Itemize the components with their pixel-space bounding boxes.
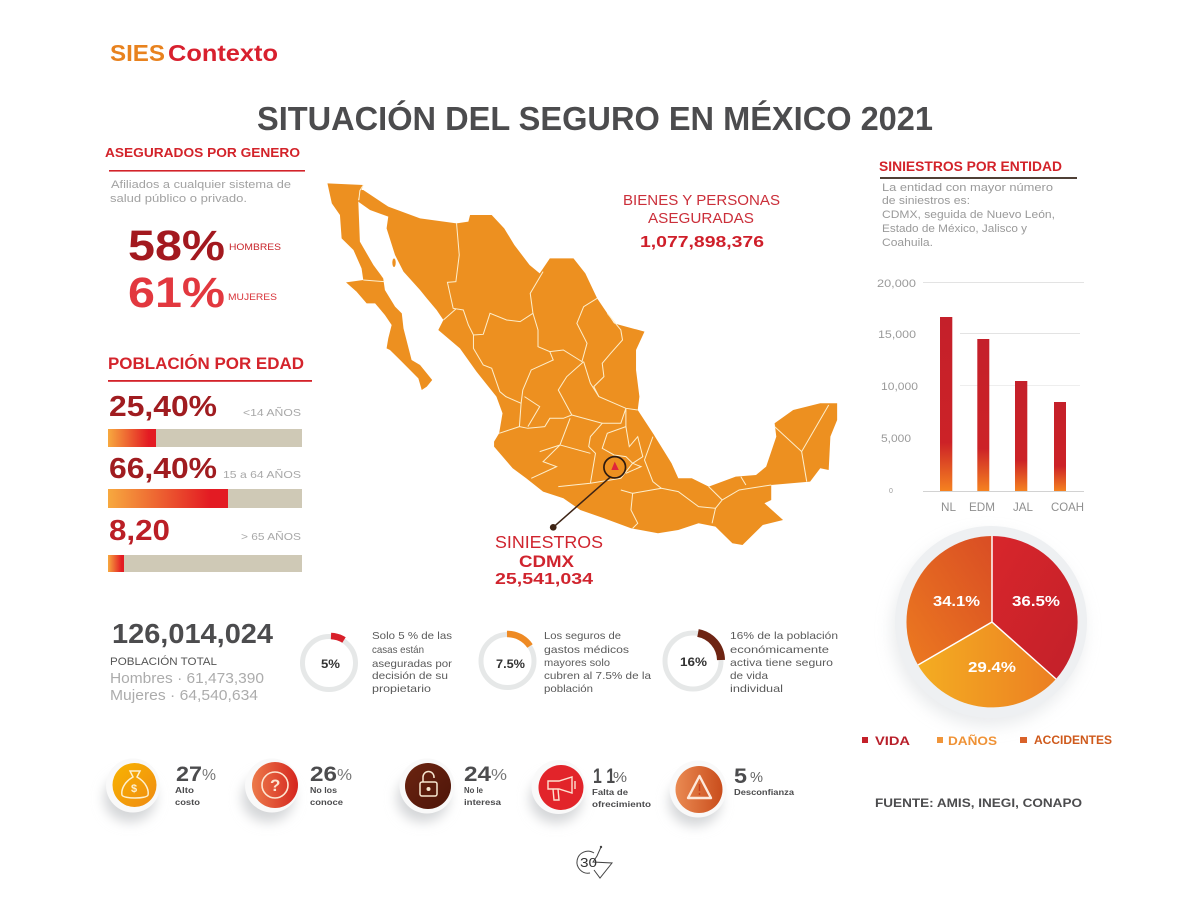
bar chart: siniestros por entidad: 0 [889, 488, 893, 495]
pie chart: tipos de seguro: 36.5% [1012, 593, 1060, 610]
icon: megaphone [530, 760, 586, 823]
bar chart: siniestros por entidad: 10,000 [881, 381, 918, 393]
donut stat: seguro de vida 16%: 16% de la población [730, 630, 838, 642]
legend: pie chart: VIDA [875, 734, 910, 748]
donut stat: casas 5%: aseguradas por [372, 658, 453, 670]
reason: no los conoce 26%: 26 [310, 763, 337, 786]
text block: entidad con mayor número: Coahuila. [882, 237, 933, 249]
callout: siniestros CDMX: CDMX [519, 552, 575, 571]
reason: no los conoce 26% [242, 758, 352, 822]
reason: desconfianza 5% [669, 760, 795, 826]
reason: alto costo 27% [104, 758, 216, 822]
stat: población total: POBLACIÓN TOTAL [110, 655, 217, 668]
donut stat: casas 5%: decisión de su [372, 670, 448, 682]
legend: pie chart [862, 733, 1112, 748]
text block: entidad con mayor número: La entidad con mayor número [882, 182, 1053, 194]
page number: 30: 30 [580, 855, 597, 870]
donut stat: gastos médicos 7.5%: 7.5% [496, 657, 525, 671]
pie chart: tipos de seguro: 29.4% [968, 659, 1016, 676]
donut stat: gastos médicos 7.5%: Los seguros de [544, 630, 621, 642]
reason: desconfianza 5%: 5 [734, 765, 747, 788]
donut stat: casas 5%: propietario [372, 683, 431, 695]
reason: falta de ofrecimiento 11%: % [613, 769, 627, 786]
donut stat: gastos médicos 7.5%: cubren al 7.5% de la [544, 670, 651, 682]
age group: mayores de 65: > 65 AÑOS [241, 530, 301, 543]
callout: siniestros CDMX: 25,541,034 [495, 571, 593, 588]
callout: bienes y personas aseguradas: 1,077,898,376 [640, 234, 764, 251]
text block: afiliados [110, 179, 291, 205]
legend: pie chart: DAÑOS [948, 733, 997, 748]
donut stat: casas 5%: casas están [372, 644, 424, 656]
reason: no le interesa 24% [397, 758, 507, 822]
panel: siniestros por entidad [877, 159, 1084, 514]
reason: falta de ofrecimiento 11%: 1 1 [593, 765, 615, 788]
reason: no los conoce 26%: conoce [310, 798, 344, 807]
icon: padlock [397, 758, 454, 822]
text block: entidad con mayor número: de siniestros es: [882, 195, 970, 207]
panel: asegurados por genero [105, 145, 305, 317]
bar chart: siniestros por entidad: 20,000 [877, 278, 916, 290]
pie chart: tipos de seguro: 34.1% [933, 593, 980, 610]
donut stat: gastos médicos 7.5%: gastos médicos [544, 644, 629, 656]
reason: no le interesa 24%: interesa [464, 798, 502, 807]
reason: falta de ofrecimiento 11% [530, 760, 651, 823]
bar chart: siniestros por entidad: 15,000 [878, 329, 916, 341]
title: SITUACIÓN DEL SEGURO EN MÉXICO 2021 [257, 100, 933, 137]
reason: alto costo 27%: costo [175, 798, 200, 807]
reason: no le interesa 24%: % [491, 767, 507, 784]
stat: 61% mujeres: 61% [128, 269, 225, 317]
reason: falta de ofrecimiento 11%: Falta de [592, 788, 629, 797]
stat: población total: Hombres · 61,473,390 [110, 670, 264, 687]
age group: mayores de 65 [108, 515, 302, 572]
map: Mexico [327, 183, 837, 545]
donut stat: gastos médicos 7.5%: población [544, 683, 593, 695]
reason: alto costo 27%: % [202, 767, 216, 784]
donut stat: seguro de vida 16%: individual [730, 683, 783, 695]
legend: pie chart: ACCIDENTES [1034, 733, 1112, 747]
stat: 61% mujeres: MUJERES [228, 292, 277, 303]
logo: SIES Contexto: Contexto [168, 40, 278, 66]
age group: menores de 14: <14 AÑOS [243, 406, 301, 419]
reason: no los conoce 26%: % [337, 767, 352, 784]
reason: alto costo 27%: Alto [175, 786, 194, 795]
stat: 61% mujeres [128, 269, 277, 317]
donut stat: seguro de vida 16%: económicamente [730, 644, 829, 656]
reason: no le interesa 24%: No le [464, 786, 484, 795]
reason: alto costo 27%: 27 [176, 763, 202, 786]
heading: siniestros por entidad: SINIESTROS POR ENTIDAD [879, 159, 1062, 174]
icon: question mark: ? [270, 776, 280, 795]
reason: no le interesa 24%: 24 [464, 763, 491, 786]
donut stat: seguro de vida 16%: de vida [730, 670, 768, 682]
reason: falta de ofrecimiento 11%: ofrecimiento [592, 800, 651, 809]
icon: warning triangle [669, 760, 726, 826]
callout: bienes y personas aseguradas: BIENES Y PERSONAS [623, 193, 780, 209]
stat: población total: Mujeres · 64,540,634 [110, 687, 258, 704]
donut stat: casas 5% [302, 630, 453, 695]
age group: 15 a 64 [108, 453, 302, 508]
donut stat: gastos médicos 7.5% [481, 630, 651, 695]
callout: siniestros CDMX: SINIESTROS [495, 532, 603, 552]
page number: 30 [577, 846, 612, 878]
age group: menores de 14 [108, 391, 302, 447]
bar chart: siniestros por entidad: COAH [1051, 500, 1084, 514]
text block: entidad con mayor número [882, 182, 1055, 249]
bar chart: siniestros por entidad: 5,000 [881, 433, 911, 445]
reason: no los conoce 26%: No los [310, 786, 338, 795]
text block: afiliados: Afiliados a cualquier sistema de [111, 179, 291, 191]
stat: 58% hombres: 58% [128, 222, 225, 270]
panel: población por edad [108, 354, 312, 572]
donut stat: seguro de vida 16% [665, 630, 838, 695]
stat: 58% hombres [128, 222, 281, 270]
stat: 58% hombres: HOMBRES [229, 242, 281, 253]
icon: money bag: $ [131, 783, 137, 795]
logo: SIES Contexto: SIES [110, 40, 165, 66]
donut stat: gastos médicos 7.5%: mayores solo [544, 657, 610, 669]
source note: FUENTE: AMIS, INEGI, CONAPO [875, 796, 1082, 810]
heading: asegurados por genero: ASEGURADOS POR GENERO [105, 145, 300, 160]
text block: afiliados: salud público o privado. [110, 193, 247, 205]
bar chart: siniestros por entidad: NL [941, 500, 956, 514]
text block: entidad con mayor número: CDMX, seguida de Nuevo León, [882, 209, 1055, 221]
callout: bienes y personas aseguradas [623, 193, 780, 251]
age group: 15 a 64: 66,40% [109, 453, 217, 485]
reason: desconfianza 5%: % [750, 769, 763, 786]
donut stat: casas 5%: Solo 5 % de las [372, 630, 452, 642]
text block: entidad con mayor número: Estado de México, Jalisco y [882, 223, 1028, 235]
logo: SIES Contexto [110, 40, 278, 66]
bar chart: siniestros por entidad [877, 278, 1084, 514]
age group: menores de 14: 25,40% [109, 391, 217, 423]
age group: mayores de 65: 8,20 [109, 515, 170, 547]
bar chart: siniestros por entidad: EDM [969, 500, 995, 514]
callout: siniestros CDMX [495, 532, 603, 588]
heading: población por edad: POBLACIÓN POR EDAD [108, 354, 304, 373]
stat: población total: 126,014,024 [112, 618, 273, 649]
donut stat: seguro de vida 16%: activa tiene seguro [730, 657, 833, 669]
bar chart: siniestros por entidad: JAL [1013, 500, 1033, 514]
stat: población total [110, 618, 273, 704]
pie chart: tipos de seguro [892, 526, 1087, 726]
callout: bienes y personas aseguradas: ASEGURADAS [648, 211, 754, 227]
donut stat: seguro de vida 16%: 16% [680, 655, 707, 669]
donut stat: casas 5%: 5% [321, 657, 340, 671]
reason: desconfianza 5%: Desconfianza [734, 788, 795, 797]
age group: 15 a 64: 15 a 64 AÑOS [223, 468, 301, 481]
